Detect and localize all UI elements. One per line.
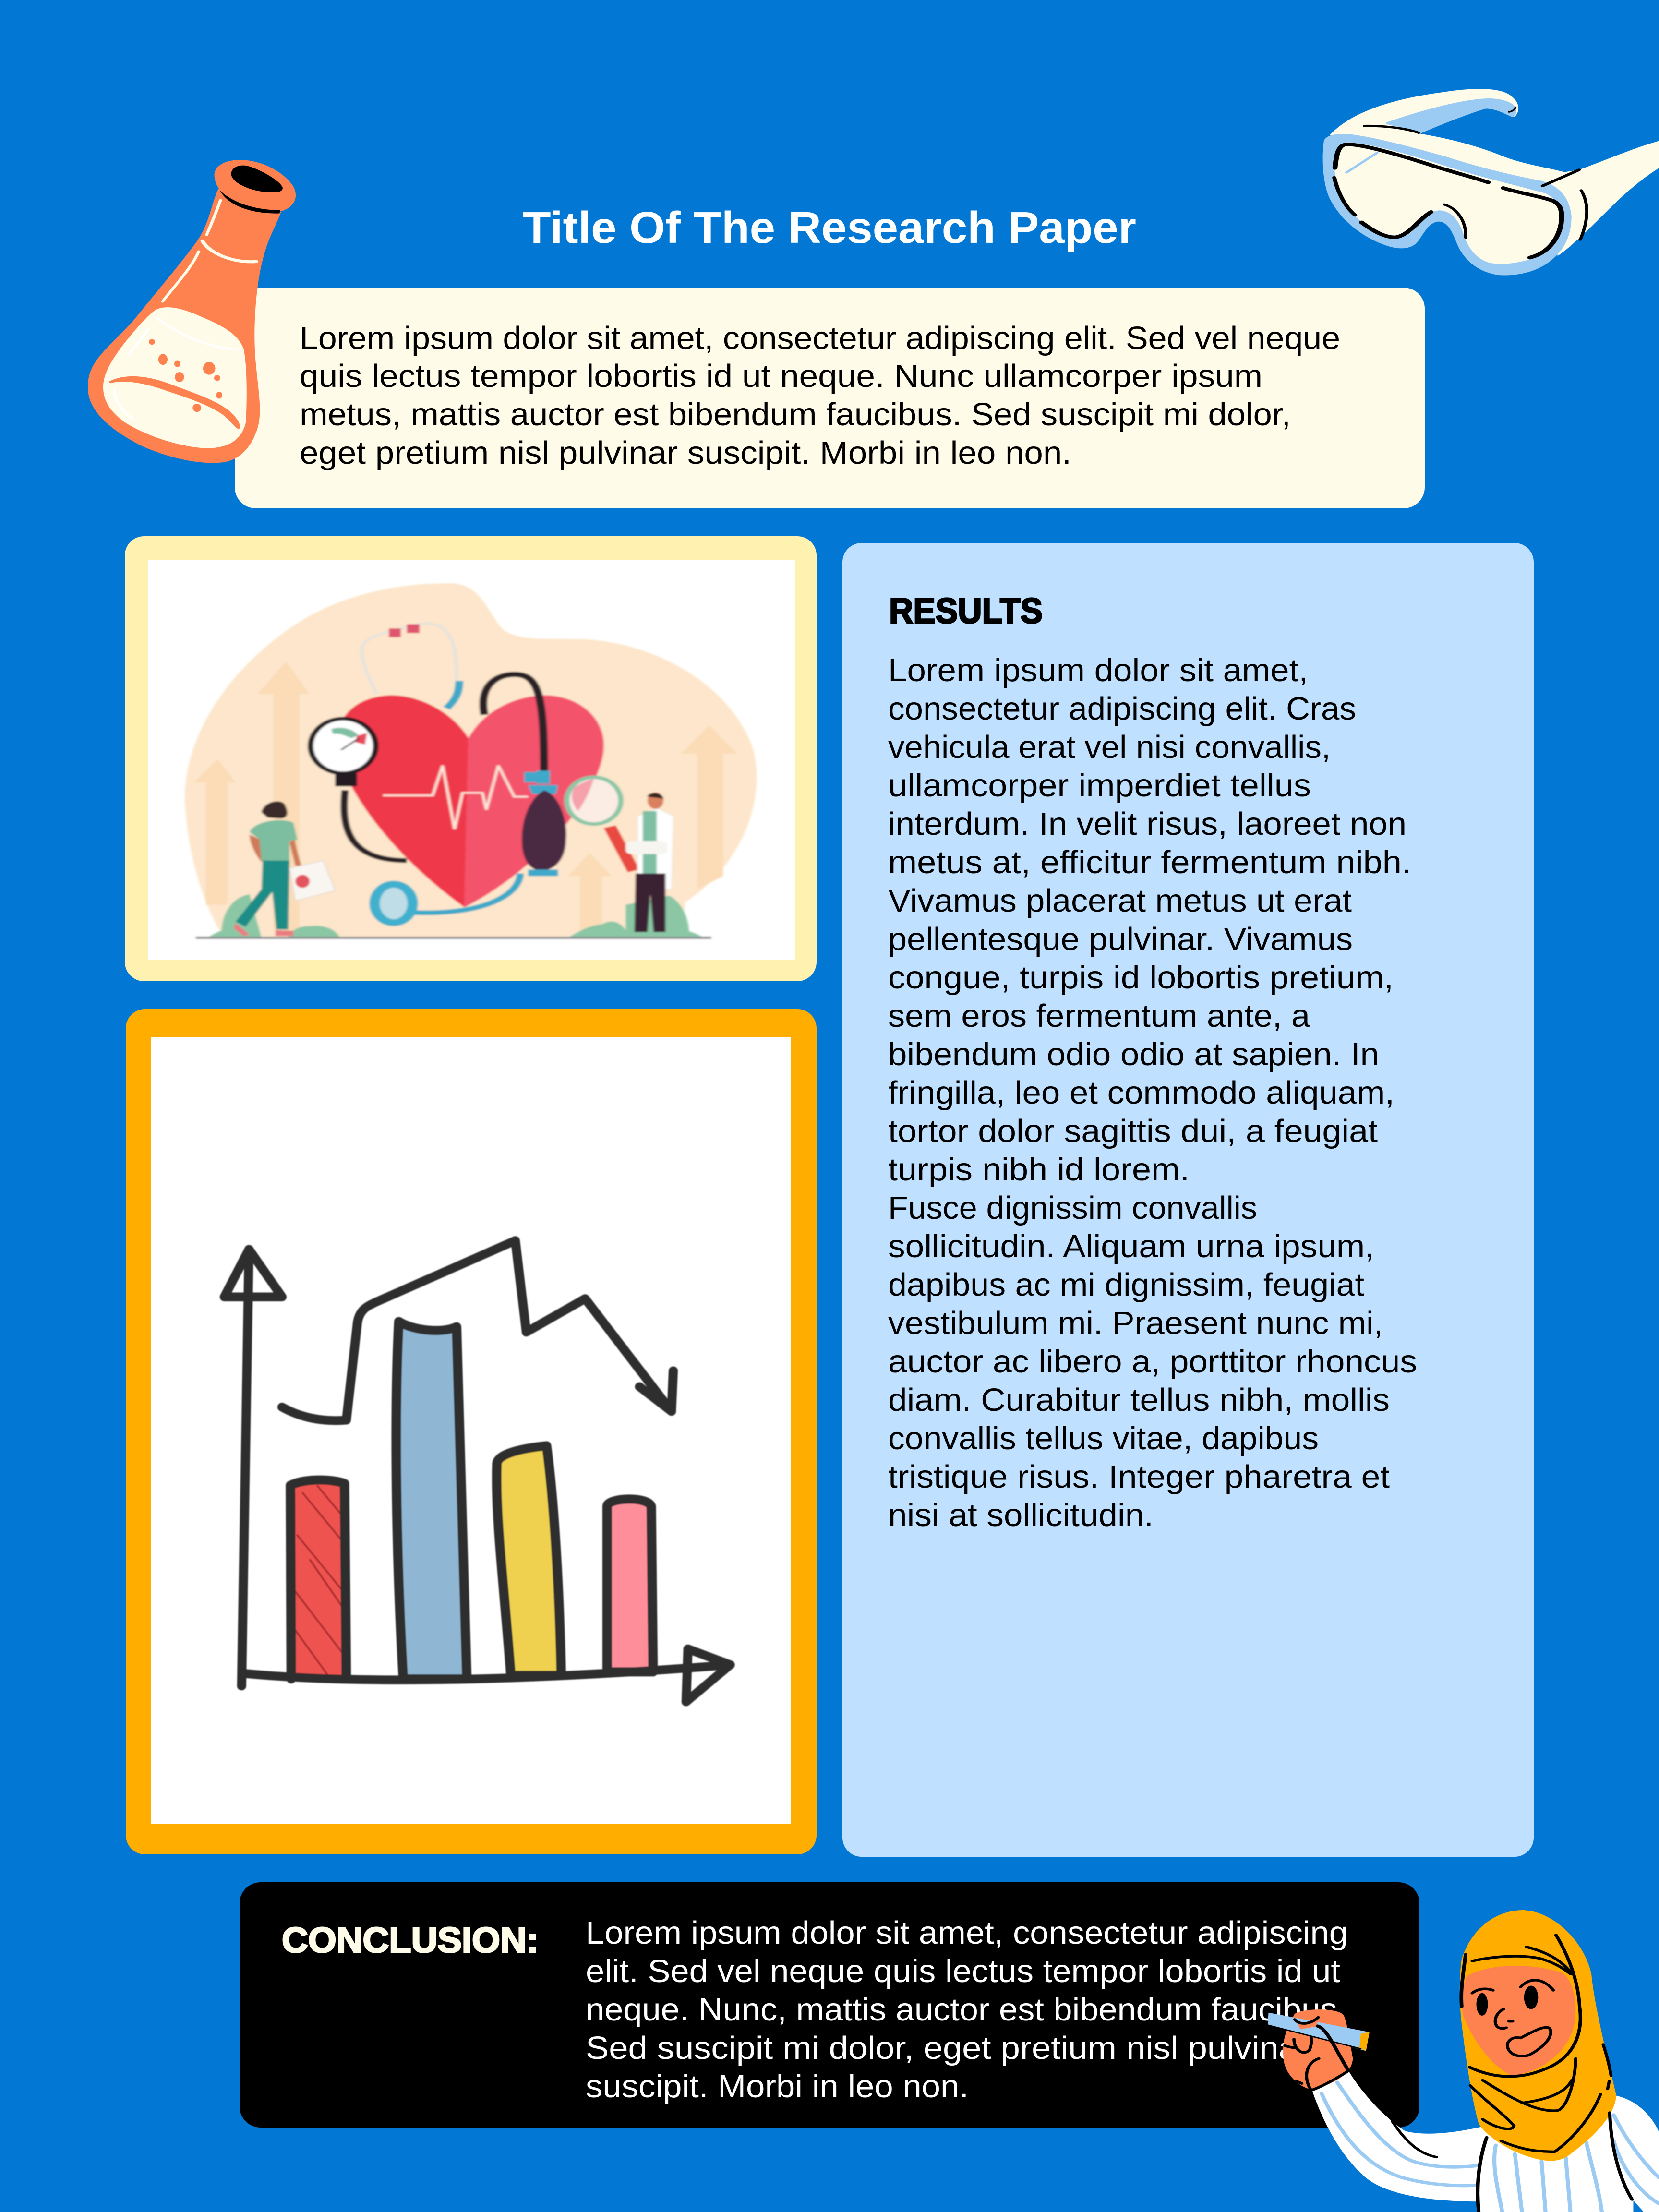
results text: bibendum odio odio at sapien. In xyxy=(888,1036,1379,1072)
conclusion text: Lorem ipsum dolor sit amet, consectetur adipiscing xyxy=(586,1915,1348,1951)
introduction text: metus, mattis auctor est bibendum faucibus. Sed suscipit mi dolor, xyxy=(300,397,1291,433)
conclusion text xyxy=(586,1915,1348,2104)
panel: results xyxy=(842,543,1534,1857)
results text: dapibus ac mi dignissim, feugiat xyxy=(888,1267,1364,1303)
results text: interdum. In velit risus, laoreet non xyxy=(888,806,1407,842)
icon: safety goggles xyxy=(1323,89,1659,275)
results text: ullamcorper imperdiet tellus xyxy=(888,768,1311,804)
conclusion heading: CONCLUSION: xyxy=(282,1920,539,1960)
introduction text: Lorem ipsum dolor sit amet, consectetur adipiscing elit. Sed vel neque xyxy=(300,320,1340,356)
chart: hand-drawn bar chart with arrow xyxy=(224,1240,730,1702)
results text: tristique risus. Integer pharetra et xyxy=(888,1459,1390,1495)
conclusion text: neque. Nunc, mattis auctor est bibendum faucibus. xyxy=(586,1992,1346,2028)
results text: Fusce dignissim convallis xyxy=(888,1190,1257,1226)
introduction text xyxy=(300,320,1340,471)
results text: auctor ac libero a, porttitor rhoncus xyxy=(888,1344,1417,1380)
illustration: scientist writing with marker xyxy=(1268,1910,1659,2212)
results text: tortor dolor sagittis dui, a feugiat xyxy=(888,1113,1378,1149)
title: Title Of The Research Paper xyxy=(523,203,1136,252)
results text: turpis nibh id lorem. xyxy=(888,1152,1190,1188)
results heading: RESULTS xyxy=(889,591,1043,631)
panel: chart frame xyxy=(126,1009,817,1854)
results text: metus at, efficitur fermentum nibh. xyxy=(888,844,1411,880)
results text xyxy=(888,652,1417,1533)
results text: sem eros fermentum ante, a xyxy=(888,998,1310,1034)
results text: diam. Curabitur tellus nibh, mollis xyxy=(888,1382,1390,1418)
introduction text: eget pretium nisl pulvinar suscipit. Morbi in leo non. xyxy=(300,435,1071,471)
results text: nisi at sollicitudin. xyxy=(888,1497,1154,1533)
icon: flask xyxy=(88,160,296,463)
conclusion text: suscipit. Morbi in leo non. xyxy=(586,2068,969,2104)
panel: introduction xyxy=(235,288,1425,508)
results text: vestibulum mi. Praesent nunc mi, xyxy=(888,1305,1383,1341)
results text: Vivamus placerat metus ut erat xyxy=(888,883,1352,919)
panel: conclusion xyxy=(240,1882,1419,2128)
results text: consectetur adipiscing elit. Cras xyxy=(888,691,1356,727)
results text: sollicitudin. Aliquam urna ipsum, xyxy=(888,1228,1374,1264)
conclusion text: elit. Sed vel neque quis lectus tempor lobortis id ut xyxy=(586,1953,1340,1989)
conclusion text: Sed suscipit mi dolor, eget pretium nisl pulvinar xyxy=(586,2030,1310,2066)
results text: fringilla, leo et commodo aliquam, xyxy=(888,1075,1395,1111)
results text: vehicula erat vel nisi convallis, xyxy=(888,729,1331,765)
results text: pellentesque pulvinar. Vivamus xyxy=(888,921,1353,957)
results text: convallis tellus vitae, dapibus xyxy=(888,1420,1319,1456)
introduction text: quis lectus tempor lobortis id ut neque. Nunc ullamcorper ipsum xyxy=(300,358,1262,394)
results text: Lorem ipsum dolor sit amet, xyxy=(888,652,1308,688)
illustration: heart with blood pressure gauge and doctors xyxy=(185,583,757,938)
results text: congue, turpis id lobortis pretium, xyxy=(888,960,1394,996)
panel: medical illustration frame xyxy=(125,536,817,981)
